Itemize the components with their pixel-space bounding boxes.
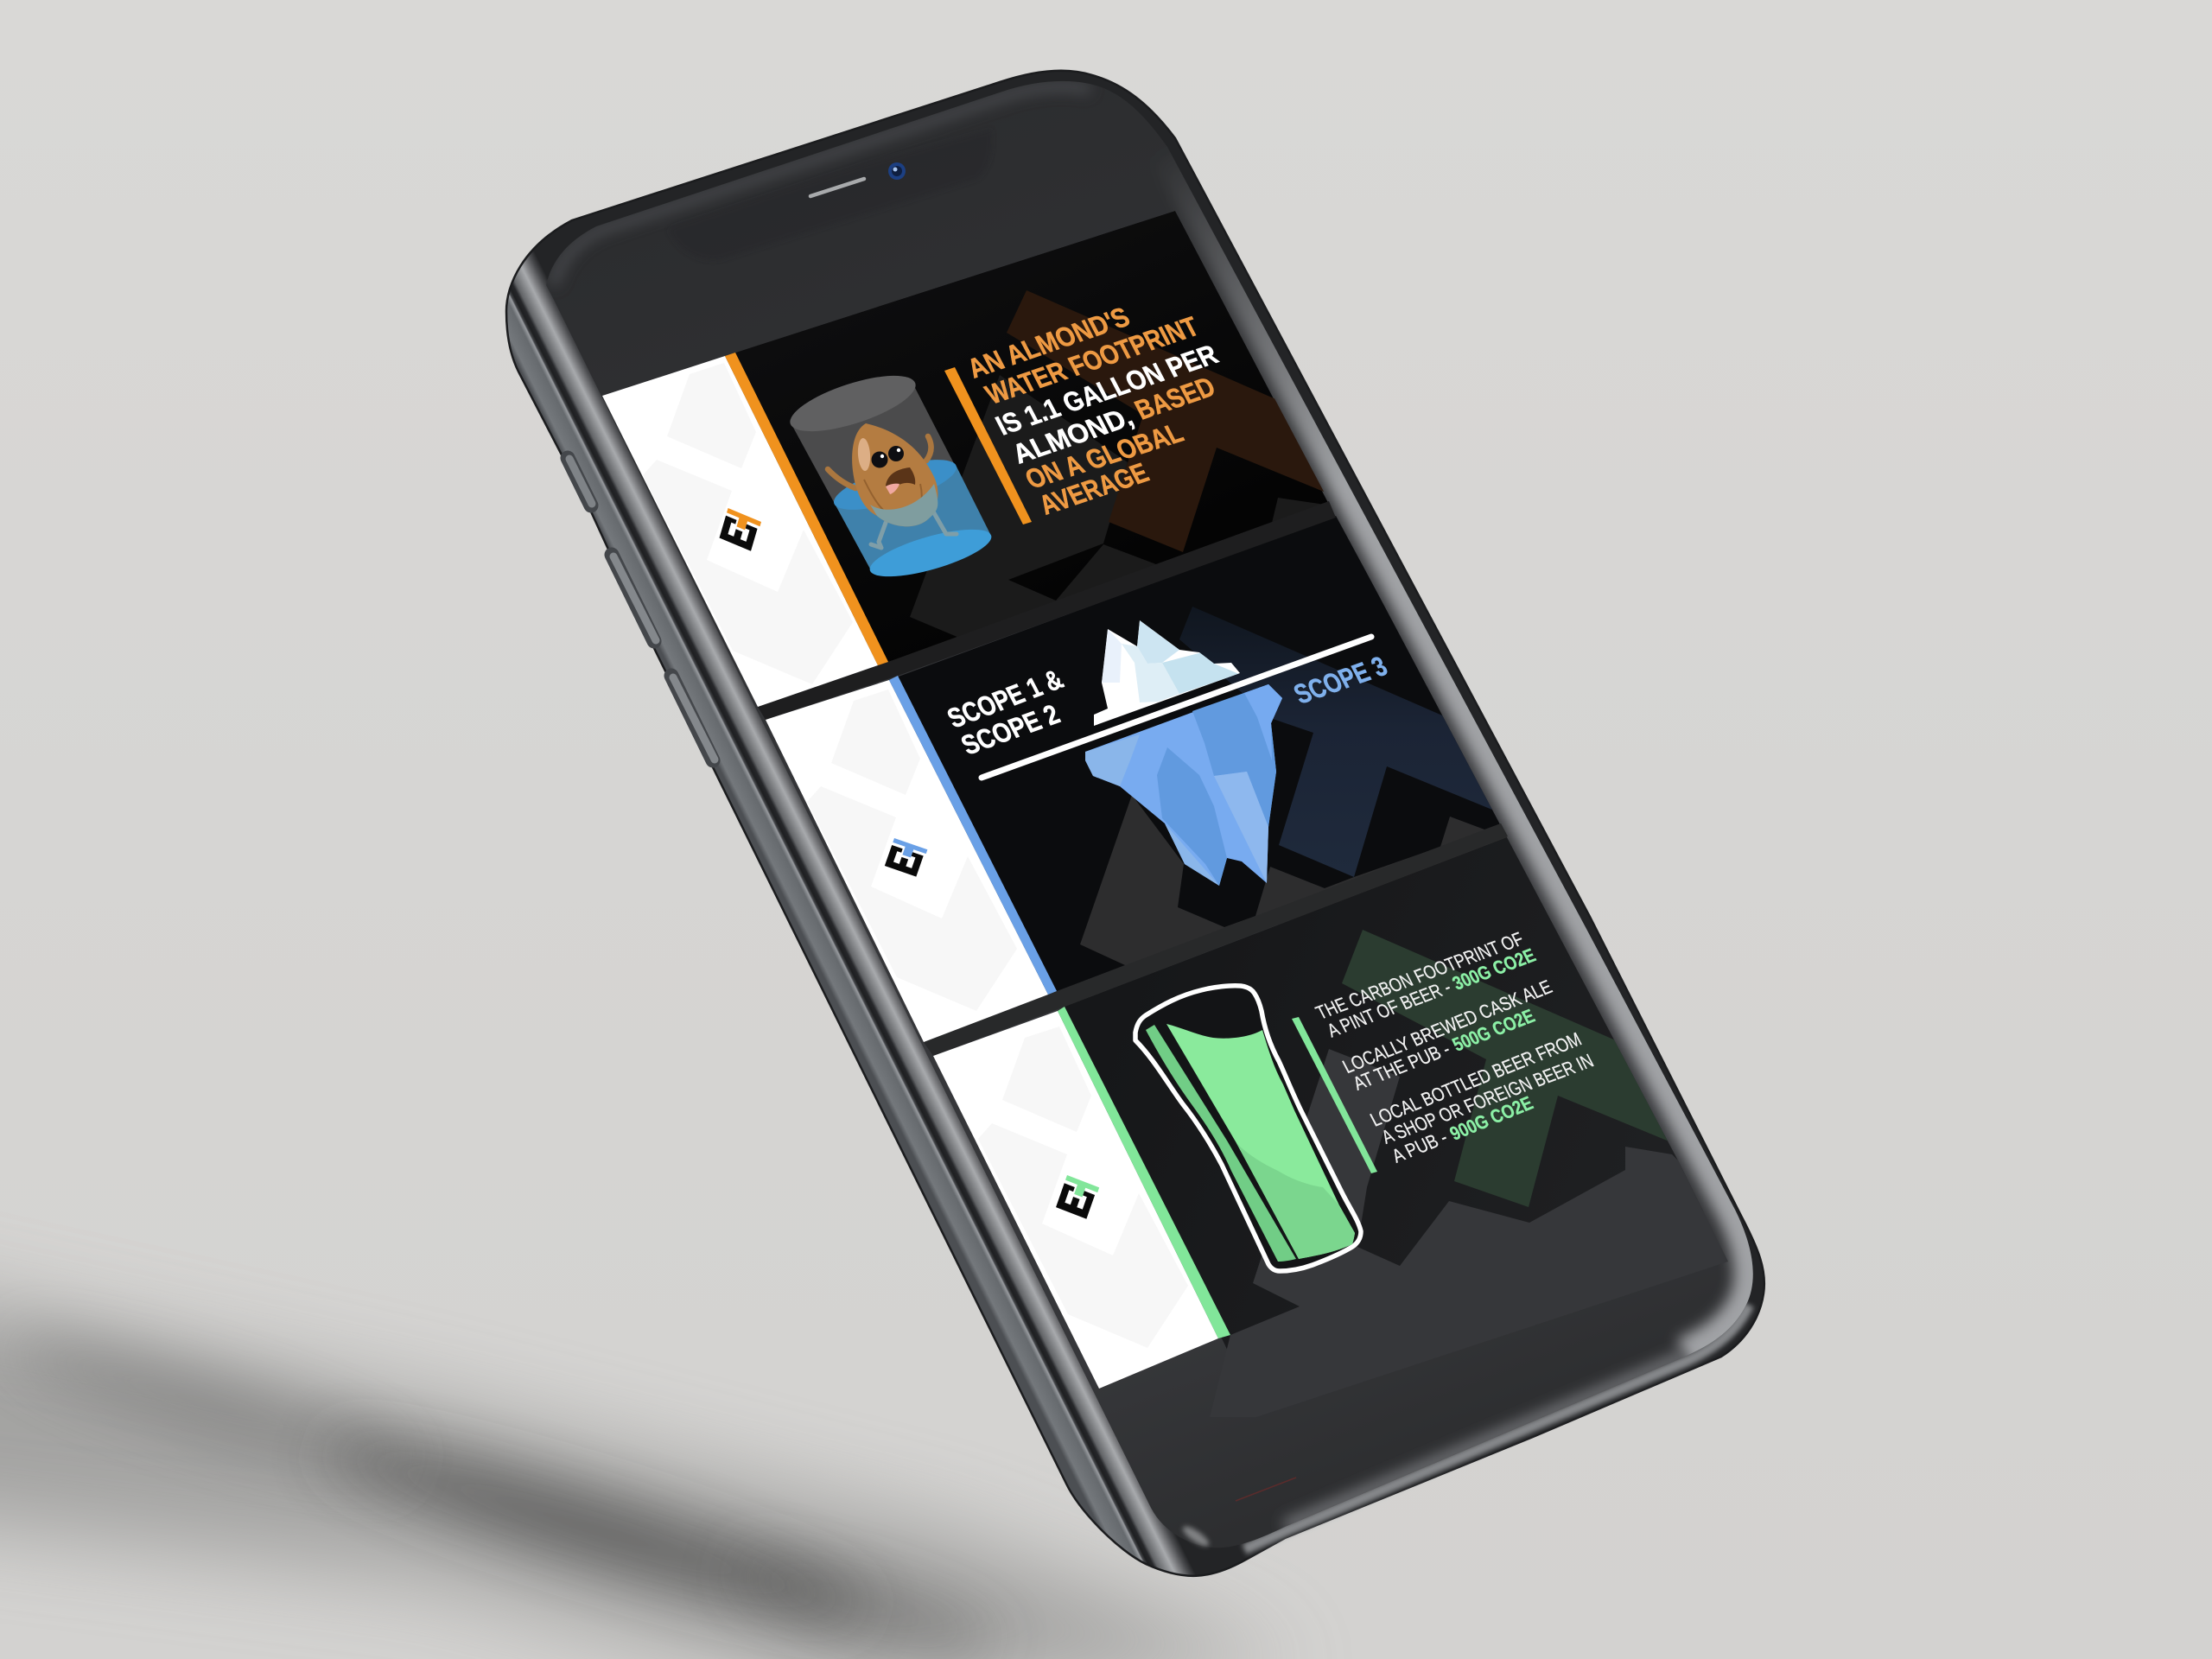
almond submerged part [870, 484, 938, 526]
iceberg right dark facet [1192, 684, 1282, 827]
beer main [1166, 1024, 1355, 1259]
divider 2 [924, 823, 1508, 1056]
bottom edge metal band [1244, 1305, 1749, 1549]
almond mouth [886, 467, 915, 494]
glass front [546, 81, 1753, 1548]
water body [834, 467, 991, 570]
panel 2: white logo strip [766, 676, 1057, 1042]
almond text block: ALMOND, [1007, 401, 1138, 469]
band 2 grey arrow [1080, 797, 1507, 975]
almond highlight [857, 438, 871, 471]
scope 1 and 2 label [942, 664, 1068, 760]
iceberg below water [1085, 684, 1282, 886]
almond text block: ON A GLOBAL [1020, 416, 1188, 494]
band 3 background [1065, 837, 1711, 1357]
scope 3 label: SCOPE 3 [1288, 650, 1392, 709]
cylinder top [785, 365, 921, 442]
corner highlight [1180, 1523, 1211, 1549]
iceberg vein facet [1157, 747, 1227, 886]
almond body [852, 423, 938, 526]
beer text block: 300G CO2E [1449, 944, 1539, 995]
almond text block [962, 301, 1223, 520]
iceberg lower left facet [1165, 823, 1219, 886]
band 3 green arrow [1342, 930, 1668, 1207]
beer text block: 500G CO2E [1449, 1005, 1538, 1056]
beer text block: A PINT OF BEER - [1324, 976, 1454, 1041]
reflection hairline [1236, 1478, 1296, 1501]
almond text block: WATER FOOTPRINT [980, 310, 1204, 410]
blue strip [889, 676, 1057, 995]
panel 1: white logo strip [602, 353, 888, 707]
beer shaded lower part [1236, 1143, 1355, 1259]
almond text block: AN ALMOND'S [962, 301, 1135, 384]
glass edge highlights [553, 86, 1753, 1527]
scope 1 and 2 label: SCOPE 1 & [942, 664, 1068, 734]
iceberg right light facet [1214, 772, 1268, 883]
band 1 grey arrow [910, 375, 1320, 637]
divider 1 [758, 501, 1336, 720]
beer text block: A PUB - [1389, 1126, 1451, 1167]
beer text block: A SHOP OR FOREIGN BEER IN [1378, 1050, 1597, 1148]
beer text block: LOCAL BOTTLED BEER FROM [1367, 1028, 1585, 1131]
almond in water cylinder icon [785, 365, 995, 586]
beer text block: THE CARBON FOOTPRINT OF [1313, 928, 1527, 1024]
beer text block: AT THE PUB - [1350, 1038, 1453, 1095]
water bottom [866, 520, 995, 586]
camera [888, 162, 906, 180]
band 2 background [889, 516, 1508, 994]
panel 3: white logo strip [933, 1007, 1230, 1389]
iceberg [1085, 620, 1282, 886]
almond legs [871, 512, 957, 548]
iceberg tip facet [1244, 684, 1282, 760]
orange strip [725, 353, 888, 665]
green strip [1058, 1007, 1230, 1338]
iceberg above water [1094, 620, 1240, 726]
glass outline [1135, 986, 1361, 1271]
water surface [829, 449, 962, 520]
notch [669, 130, 992, 260]
almond eyes [871, 446, 904, 468]
band 3 grey arrow [1227, 1049, 1728, 1357]
band 2 blue arrow [1179, 607, 1492, 877]
beer text block [1313, 928, 1597, 1167]
speaker [810, 179, 864, 196]
almond text block: BASED [1129, 371, 1220, 425]
almond text block: IS 1.1 GALLON PER [990, 339, 1223, 441]
logo 3 [1056, 1175, 1099, 1219]
phone drop shadow [0, 1253, 1296, 1659]
almond text block: AVERAGE [1033, 457, 1154, 520]
side buttons [568, 458, 715, 760]
waterline [982, 637, 1371, 778]
beer side strip [1146, 1025, 1296, 1262]
scope 1 and 2 label: SCOPE 2 [956, 698, 1065, 760]
green accent bar [1292, 1017, 1377, 1173]
almond grooves [864, 480, 922, 510]
phone body [506, 71, 1764, 1576]
band 1 orange arrow [1007, 290, 1324, 552]
phone [506, 71, 1764, 1576]
iceberg light facets [1102, 620, 1239, 702]
almond arms [828, 436, 931, 488]
beer text block: 900G CO2E [1446, 1092, 1536, 1145]
band 1 background [725, 211, 1335, 662]
iceberg left facet [1085, 734, 1140, 786]
beer text block: LOCALLY BREWED CASK ALE [1339, 976, 1555, 1077]
logo 1 [720, 508, 761, 552]
screen content [725, 211, 1728, 1417]
almond tongue [886, 484, 899, 494]
cylinder body [791, 385, 991, 570]
orange accent bar [944, 367, 1032, 524]
pint glass icon [1135, 986, 1361, 1271]
logo 2 [885, 838, 927, 877]
